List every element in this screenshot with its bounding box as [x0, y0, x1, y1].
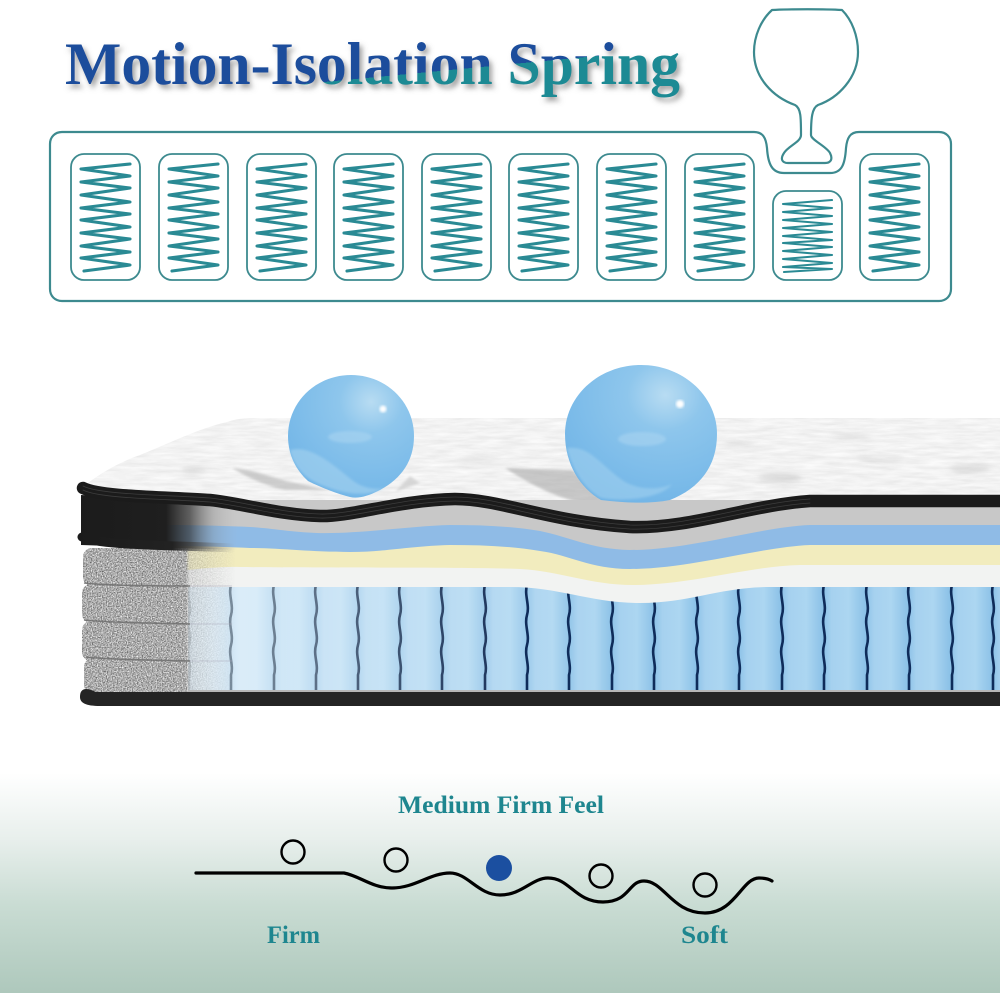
panel frame with notch — [50, 132, 951, 301]
ball shadow right of left ball — [395, 476, 420, 492]
ball reflections — [290, 449, 385, 494]
firmness background gradient — [0, 773, 1000, 993]
ball right — [565, 365, 717, 503]
bottom black border — [80, 689, 1000, 706]
side panel seams — [84, 583, 232, 661]
spring cell 10 — [860, 154, 929, 280]
ball shadow left — [232, 468, 330, 490]
ball shadow right — [505, 468, 610, 505]
compressed spring cell — [773, 191, 842, 280]
quilted top surface — [86, 418, 1000, 527]
marker: selected medium firm — [486, 855, 512, 881]
spring cell 1 — [71, 154, 140, 280]
spring cell 4 — [334, 154, 403, 280]
ball reflections — [567, 448, 672, 499]
foam layer: white — [150, 510, 1000, 603]
panel: spring diagram — [50, 132, 951, 301]
spring cell 5 — [422, 154, 491, 280]
spring cell 8 — [685, 154, 754, 280]
label: firm: Firm — [267, 922, 320, 949]
marker: firm — [282, 840, 304, 864]
top edge piping — [83, 486, 1000, 529]
wave line — [196, 873, 772, 913]
heading: medium firm feel: Medium Firm Feel — [398, 792, 604, 819]
spring cell 2 — [159, 154, 228, 280]
label: soft: Soft — [681, 922, 729, 949]
foam layer: yellow — [150, 510, 1000, 585]
spring dividers — [188, 585, 994, 690]
marker: medium soft — [590, 864, 612, 888]
foam layer: gray — [150, 500, 1000, 550]
marker: soft — [694, 874, 716, 896]
ball left — [288, 375, 414, 498]
mattress illustration — [80, 365, 1000, 706]
spring cell 7 — [597, 154, 666, 280]
black side band — [81, 495, 240, 550]
title: Motion-Isolation Spring — [65, 31, 680, 97]
icon: wine glass — [754, 9, 858, 163]
spring cell 6 — [509, 154, 578, 280]
foam layer: blue — [150, 505, 1000, 569]
pocket springs — [188, 580, 1000, 691]
firmness scale — [196, 792, 772, 949]
marker: medium firm — [384, 848, 408, 872]
lower side piping — [82, 537, 232, 548]
gray side panels — [82, 548, 230, 692]
quilting marks — [181, 434, 990, 483]
spring cell 3 — [247, 154, 316, 280]
